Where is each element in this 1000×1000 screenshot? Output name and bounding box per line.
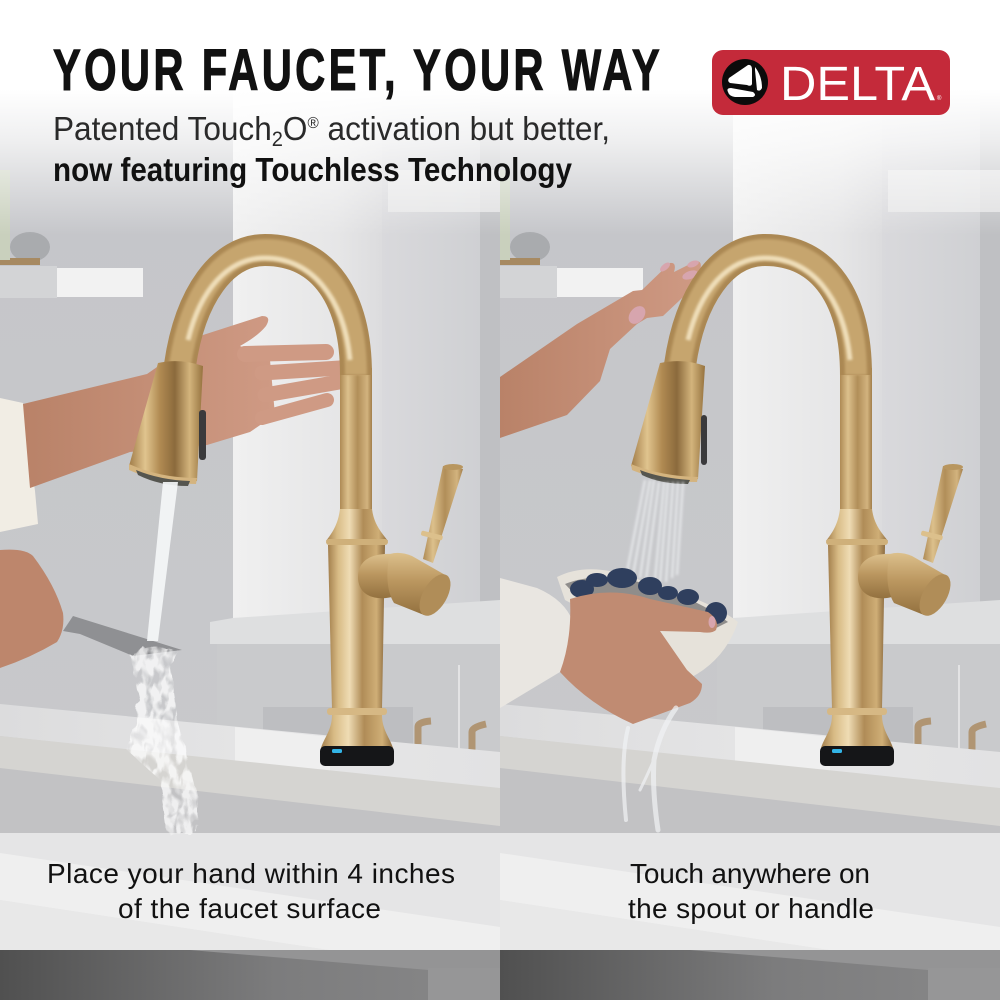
faucet: left <box>180 250 463 766</box>
top white fade behind the heading <box>0 0 1000 235</box>
faucet: right <box>680 250 963 766</box>
logo icon: delta triangle <box>722 59 768 105</box>
sleeve: right <box>500 578 573 708</box>
caption: right <box>628 858 874 924</box>
logo wordmark: DELTA <box>780 58 935 111</box>
subtitle line 1: Patented Touch <box>53 110 282 147</box>
bowl <box>557 568 738 678</box>
bottom dark strip: right <box>500 950 1000 1000</box>
water stream <box>147 482 178 641</box>
registered mark: ® <box>937 95 942 102</box>
water splash <box>127 646 198 833</box>
thumbnail <box>708 616 716 628</box>
faucet spray head: left <box>129 361 206 486</box>
subtitle line 2: now featuring Touchless Technology <box>53 151 573 188</box>
faucet spray head: right <box>631 361 707 484</box>
caption: left <box>47 858 455 924</box>
hand holding bowl <box>560 592 717 724</box>
panel: hover activation photo (left) <box>0 250 463 833</box>
sleeve: upper arm <box>0 398 38 532</box>
title: YOUR FAUCET, YOUR WAY <box>53 37 663 103</box>
water dripping below hand <box>623 708 676 830</box>
subtitle line 1: activation but better, <box>319 110 610 147</box>
bottom dark strip: left <box>0 950 500 1000</box>
forearm and palm <box>23 316 275 488</box>
water spray <box>627 480 683 582</box>
subtitle line 1: O <box>283 110 307 147</box>
fingernails <box>625 259 700 327</box>
caption: right: Touch anywhere on <box>630 858 870 889</box>
caption band: left and right <box>0 833 1000 950</box>
blueberries <box>570 568 727 624</box>
background scene: left kitchen panel <box>0 0 500 1000</box>
logo: Delta <box>712 50 950 115</box>
lower hand holding utensil <box>0 550 63 668</box>
background scene: right kitchen panel <box>500 0 1000 1000</box>
subtitle line 1: 2 <box>272 128 283 151</box>
fingers <box>245 352 345 418</box>
caption: right: the spout or handle <box>628 893 874 924</box>
panel: touch activation photo (right) <box>500 250 963 830</box>
caption: left: Place your hand within 4 inches <box>47 858 455 889</box>
arm and hand touching spout <box>500 261 701 438</box>
utensil blade <box>63 616 182 656</box>
caption: left: of the faucet surface <box>118 893 381 924</box>
subtitle line 1: ® <box>307 115 319 132</box>
